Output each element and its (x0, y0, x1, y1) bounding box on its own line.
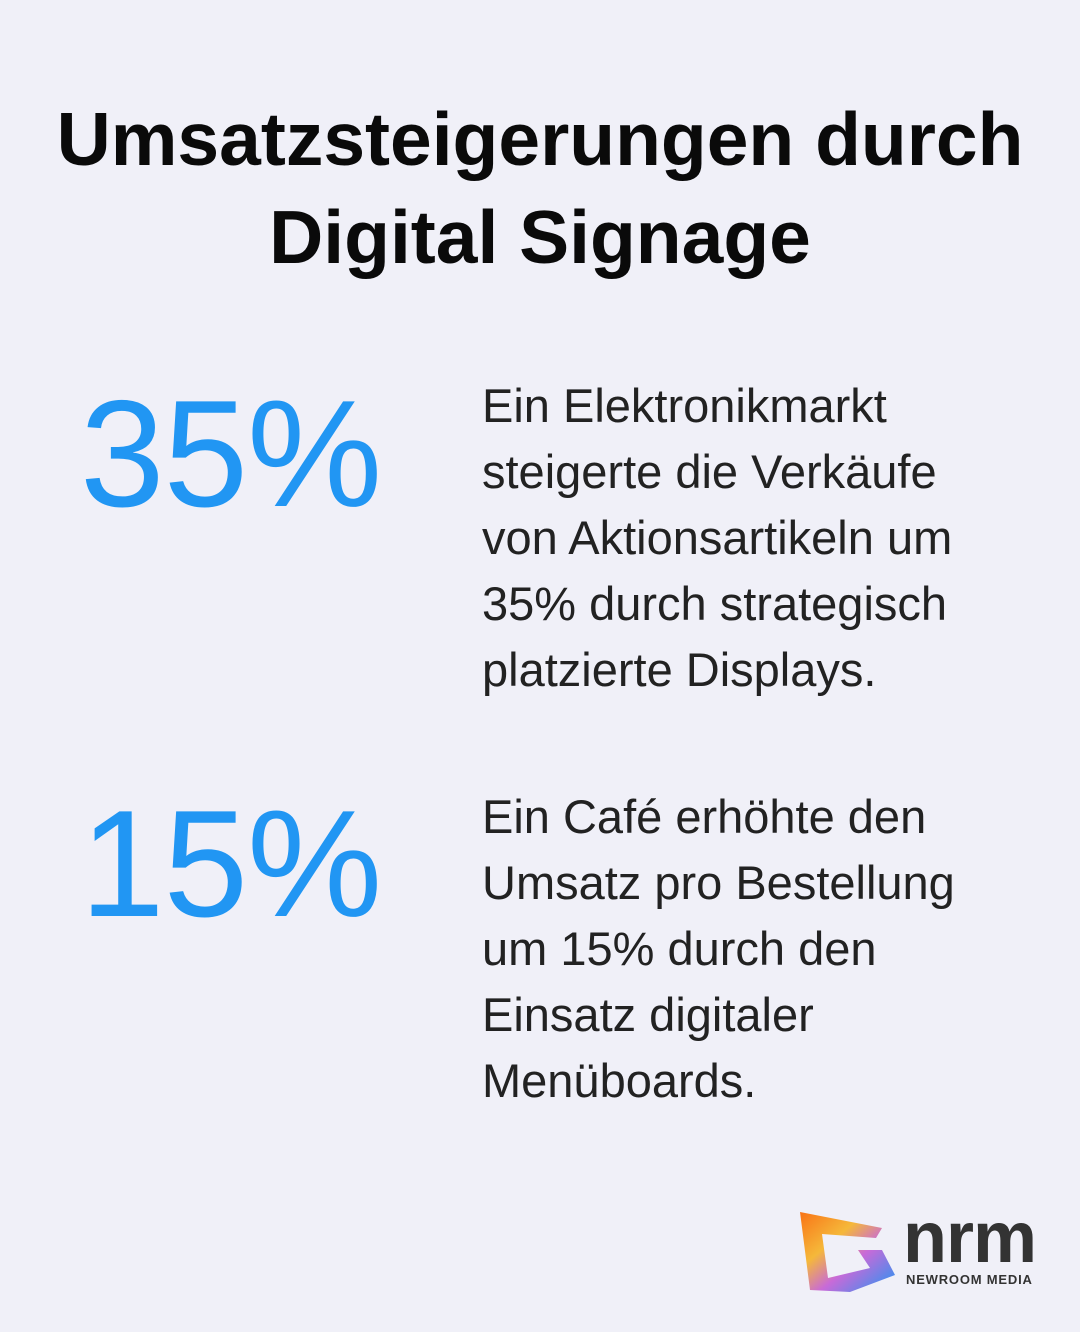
text: 15% description: Einsatz digitaler (482, 988, 814, 1041)
stat: 35%: 35% (80, 369, 381, 539)
logo text: nrm (903, 1198, 1036, 1278)
text: 15% description: um 15% durch den (482, 922, 877, 975)
text: 35% description: von Aktionsartikeln um (482, 511, 952, 564)
text: 35% description: platzierte Displays. (482, 643, 876, 696)
icon: logo mark (800, 1212, 895, 1292)
text: 35% description (482, 379, 952, 696)
text: 35% description: steigerte die Verkäufe (482, 445, 937, 498)
stat: 15%: 15% (80, 779, 381, 949)
logo (800, 1198, 1036, 1292)
logo: NEWROOM MEDIA (906, 1272, 1033, 1287)
title (57, 97, 1023, 279)
text: 15% description: Menüboards. (482, 1054, 756, 1107)
title: Umsatzsteigerungen durch (57, 97, 1023, 181)
text: 15% description: Ein Café erhöhte den (482, 790, 926, 843)
text: 15% description: Umsatz pro Bestellung (482, 856, 955, 909)
text: 15% description (482, 790, 955, 1107)
text: 35% description: 35% durch strategisch (482, 577, 947, 630)
text: 35% description: Ein Elektronikmarkt (482, 379, 887, 432)
title: Digital Signage (269, 195, 811, 279)
